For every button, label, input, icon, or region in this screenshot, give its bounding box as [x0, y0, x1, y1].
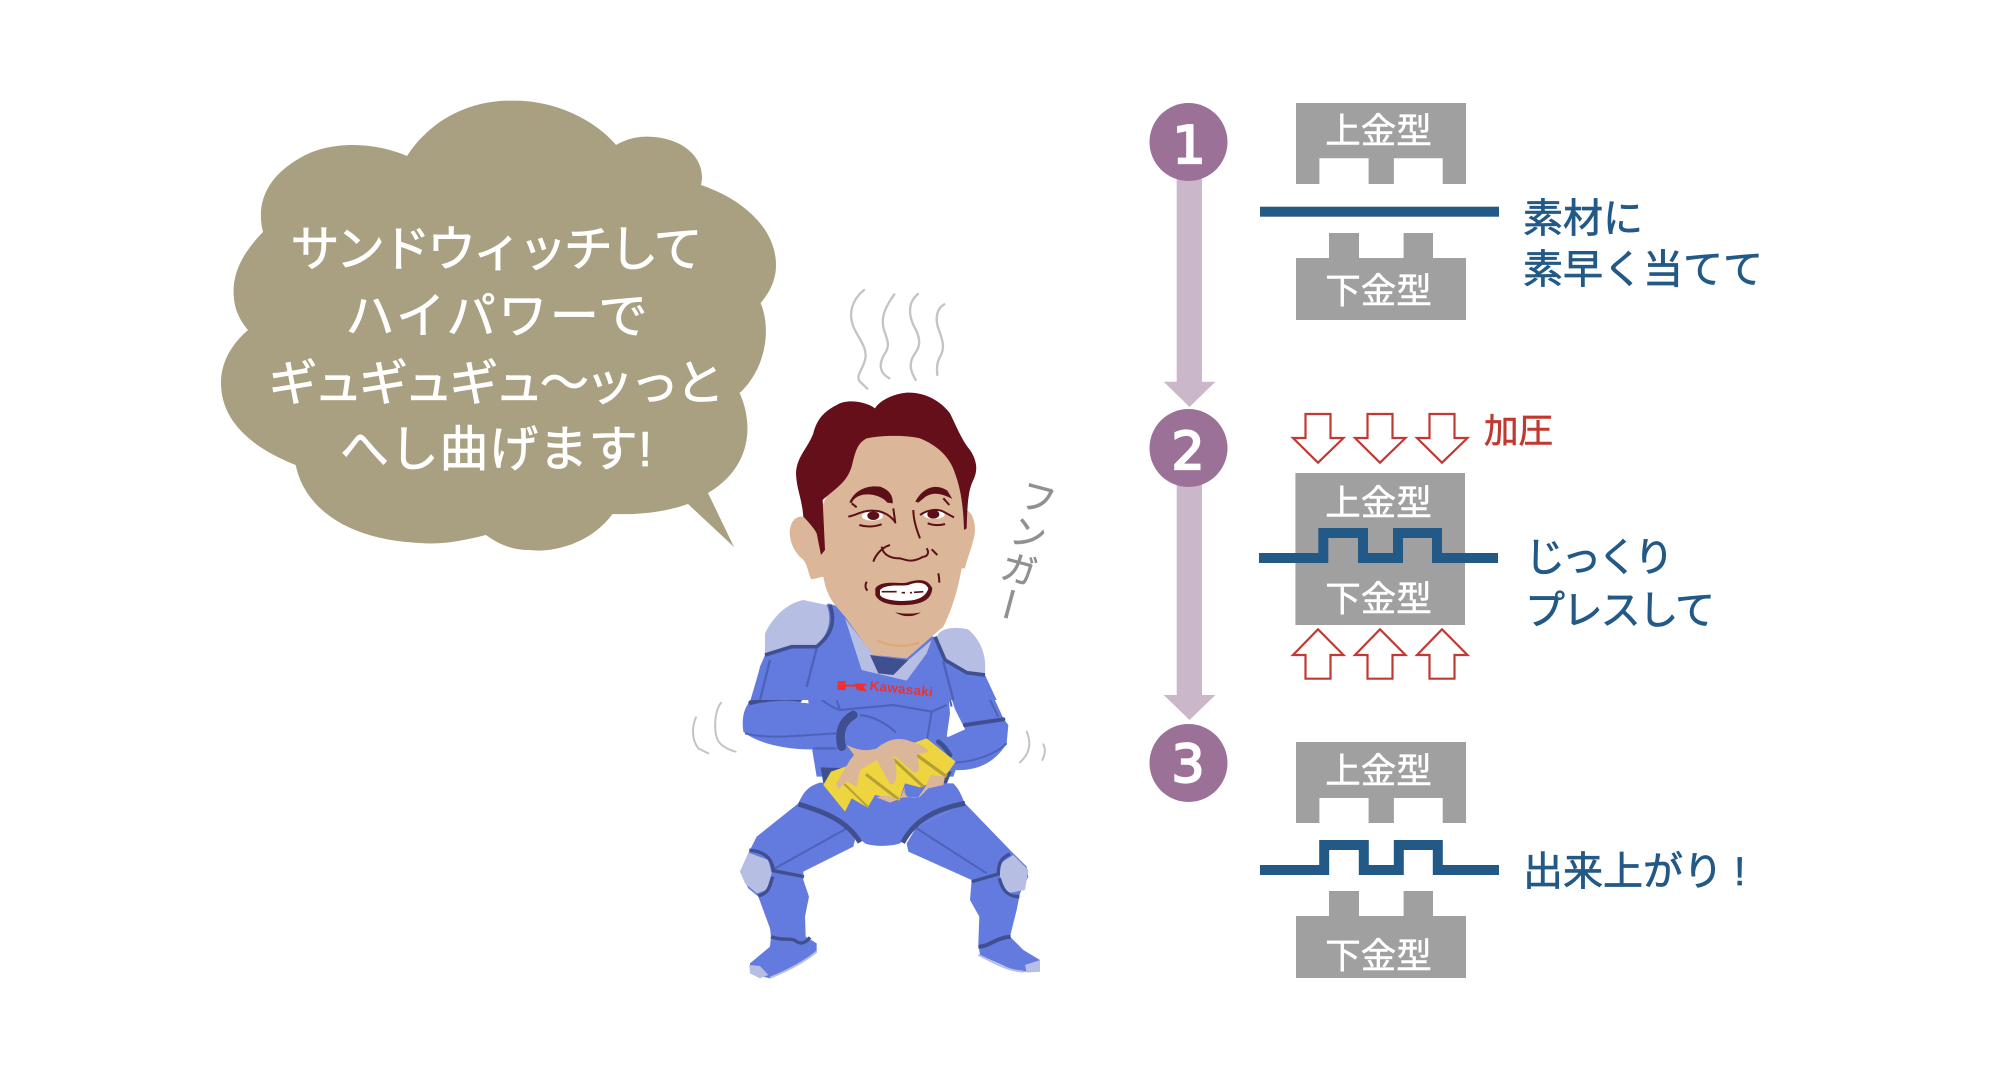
material bar flat	[1260, 207, 1499, 217]
hands	[836, 739, 945, 803]
facial features	[848, 486, 954, 591]
step 2 caption	[1525, 536, 1715, 633]
steam above head	[851, 290, 944, 389]
step arrow 1 to 2	[1164, 170, 1215, 407]
material bar pressed	[1259, 533, 1498, 558]
lower die: 下金型	[1325, 936, 1432, 976]
motion lines	[693, 703, 1045, 762]
step 3 dies	[1260, 742, 1499, 978]
bubble text: へし曲げます!	[340, 423, 652, 477]
upper die	[1296, 103, 1466, 184]
lower die	[1296, 233, 1466, 320]
speech bubble	[221, 101, 776, 551]
upper body and head	[752, 393, 1060, 700]
bubble text: ギュギュギュ〜ッっと	[268, 357, 724, 411]
step 3 caption: 出来上がり !	[1523, 850, 1745, 894]
step 3 number: 3	[1171, 735, 1205, 795]
mouth	[875, 580, 932, 616]
step 1 caption: 素早く当てて	[1523, 248, 1763, 292]
closed die: 下金型	[1325, 579, 1432, 619]
pressure arrows, top	[1293, 414, 1468, 463]
upper die: 上金型	[1325, 751, 1432, 791]
Kawasaki logo: Kawasaki	[869, 678, 934, 700]
step 3 number	[1150, 724, 1228, 802]
pressure label: 加圧	[1484, 413, 1553, 451]
face and neck	[790, 430, 975, 658]
step 2 number: 2	[1171, 422, 1205, 482]
sound effect: フンガー	[983, 474, 1060, 628]
upper die	[1296, 742, 1466, 823]
closed die: 上金型	[1325, 483, 1432, 523]
bubble text: ハイパワーで	[346, 290, 648, 344]
upper die: 上金型	[1325, 111, 1432, 151]
step 2 caption: じっくり	[1525, 536, 1674, 580]
pressure arrows, bottom	[1293, 629, 1468, 679]
bubble text: サンドウィッチして	[290, 223, 702, 277]
hair	[796, 393, 976, 555]
step 2 number	[1150, 409, 1228, 487]
step 1 caption: 素材に	[1523, 197, 1643, 241]
step arrow 2 to 3	[1164, 480, 1215, 720]
character: worker bending a gear	[693, 290, 1060, 978]
step 1 number	[1150, 103, 1228, 181]
step 1 dies	[1260, 103, 1499, 320]
closed die	[1259, 473, 1498, 625]
lower die	[1296, 891, 1466, 978]
step 2 caption: プレスして	[1525, 589, 1715, 633]
step 1 number: 1	[1172, 116, 1206, 176]
lower body: arms, legs, gear	[693, 673, 1045, 978]
formed material	[1260, 845, 1499, 870]
step 1 caption	[1523, 197, 1763, 292]
lower die: 下金型	[1325, 271, 1432, 311]
gear being bent	[823, 738, 956, 812]
Kawasaki logo	[838, 678, 934, 700]
bubble text	[268, 223, 724, 477]
